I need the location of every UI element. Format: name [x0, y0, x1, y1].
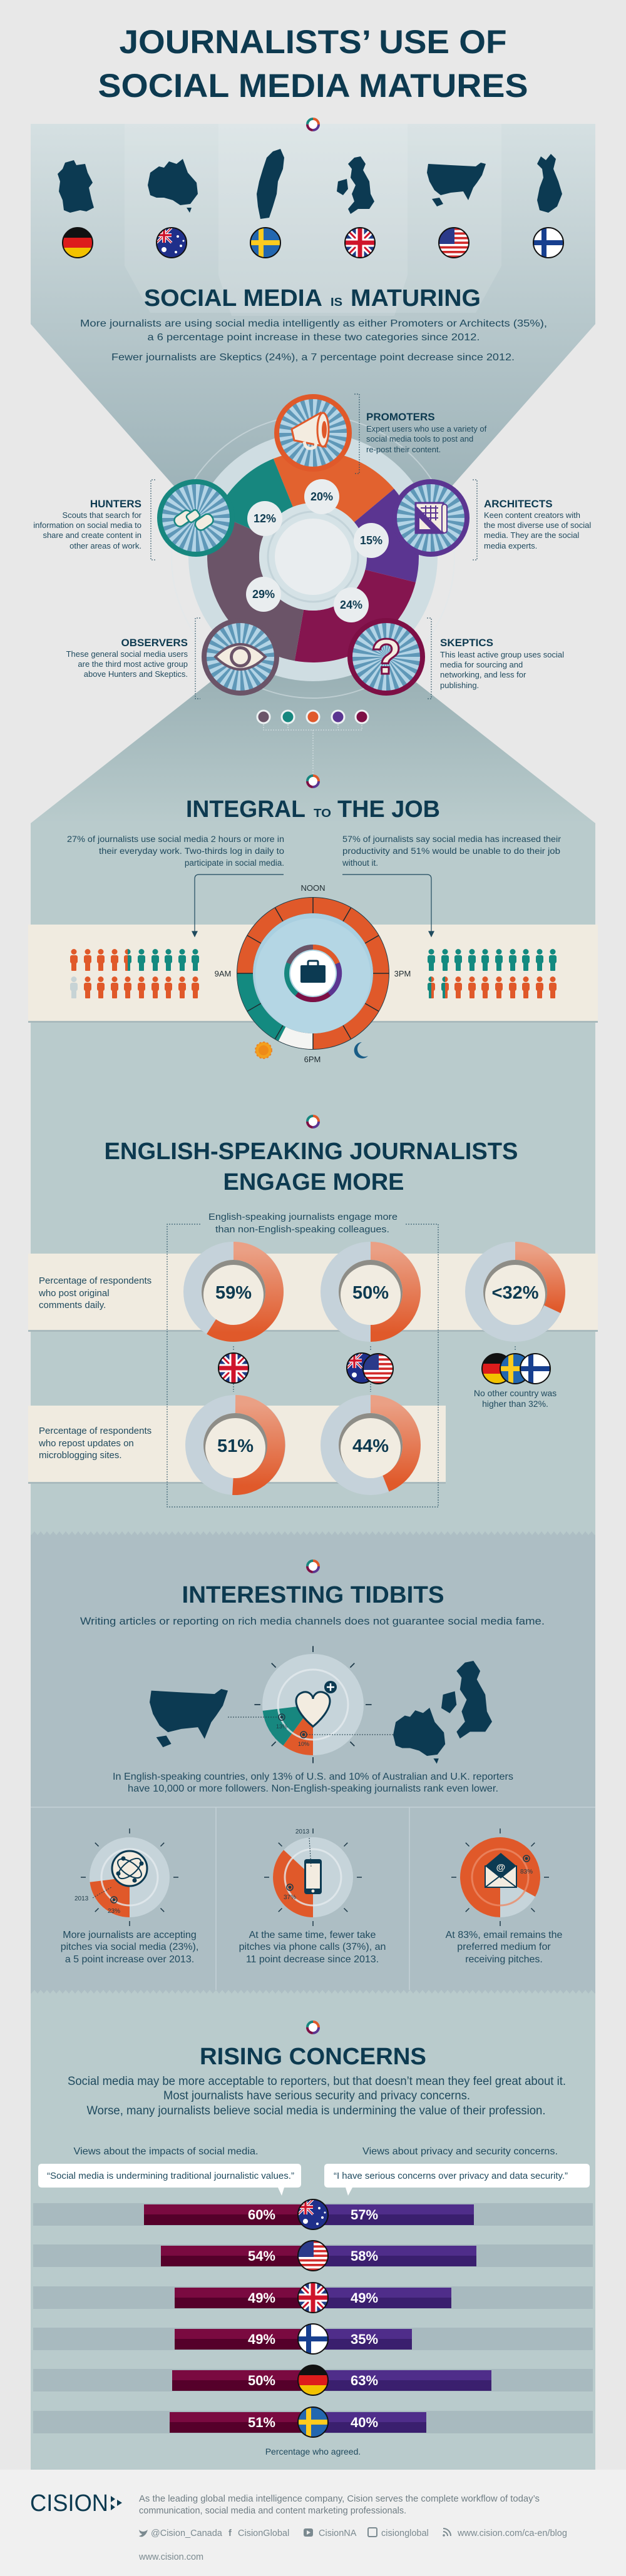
badges: percentages: 29% — [252, 588, 275, 601]
text: followers: have 10,000 or more followers. Non-English-speaking journalists rank even lower. — [128, 1783, 498, 1794]
text: footer blurb — [139, 2494, 540, 2516]
heading: english-speaking journalists: ENGLISH-SPEAKING JOURNALISTS — [104, 1138, 518, 1165]
label: promoters: social media tools to post and — [366, 434, 473, 444]
map: US — [150, 1689, 228, 1747]
icon: architects blueprint — [394, 482, 467, 554]
label: hunters: share and create content in — [43, 530, 141, 540]
icon: sun — [255, 1042, 272, 1058]
icon: logo ring 3 — [307, 1116, 319, 1127]
row: United Kingdom: 49% — [351, 2290, 378, 2306]
country flags — [63, 228, 563, 258]
label: promoters — [354, 394, 487, 474]
text: no other country — [474, 1388, 557, 1409]
clock labels: 3PM — [394, 969, 411, 978]
legend dots — [257, 711, 368, 774]
chart: phone pitches gauge: 37% — [284, 1894, 296, 1901]
label: promoters: re-post their content. — [366, 445, 441, 454]
badges: percentages: 20% — [310, 490, 333, 503]
text: tidbit 1: a 5 point increase over 2013. — [65, 1954, 194, 1965]
callout: privacy — [324, 2164, 590, 2196]
text: maturing paragraph: More journalists are using social media intelligently as either Promoters or Architects (35%), — [80, 318, 547, 329]
label: skeptics: networking, and less for — [440, 670, 526, 679]
text: website: www.cision.com — [138, 2552, 203, 2562]
social links: f — [228, 2528, 232, 2538]
row: United States: 58% — [351, 2248, 378, 2264]
text: views headings: Views about the impacts of social media. — [74, 2146, 258, 2157]
icon: envelope — [485, 1853, 516, 1887]
text: integral right: 57% of journalists say social media has increased their — [342, 834, 562, 844]
donut: 51%: 51% — [217, 1436, 254, 1456]
label: architects: media experts. — [484, 541, 537, 550]
icon: briefcase — [300, 961, 326, 983]
dotted box: english-speaking — [167, 1224, 438, 1507]
chart: followers heart gauge — [228, 1646, 393, 1763]
text: integral right — [342, 834, 562, 868]
clock labels: 6PM — [304, 1055, 321, 1064]
heading: english-speaking journalists — [104, 1138, 518, 1195]
icon: envelope: @ — [496, 1862, 505, 1873]
chart: social pitches gauge: 2013 — [74, 1895, 89, 1902]
icon: skeptics question: ? — [371, 629, 401, 684]
text: followers: In English-speaking countries, only 13% of U.S. and 10% of Australian and U.K. reporters — [113, 1772, 513, 1782]
label: observers: are the third most active group — [78, 659, 188, 669]
social links: cisionglobal — [381, 2528, 429, 2538]
callout: journalistic values: “Social media is undermining traditional journalistic values.” — [47, 2171, 294, 2181]
chart: followers heart gauge: 10% — [298, 1741, 309, 1747]
social links: CisionGlobal — [238, 2528, 289, 2538]
donut: <32% — [475, 1251, 557, 1332]
callout: journalistic values — [38, 2164, 301, 2196]
social links: www.cision.com/ca-en/blog — [457, 2528, 567, 2538]
clock labels: NOON — [300, 883, 326, 893]
icon: hunters binoculars — [160, 482, 232, 554]
icon: logo ring 1 — [307, 119, 319, 130]
logo: cision: CISION — [30, 2490, 108, 2517]
text: comments label: who post original — [38, 1288, 110, 1299]
title: JOURNALISTS’ USE OF — [119, 24, 507, 61]
text: integral right: productivity and 51% would be unable to do their job — [342, 846, 560, 856]
text: footer blurb: As the leading global media intelligence company, Cision serves the complete workflow of today’s — [139, 2494, 540, 2504]
heading: social media is maturing: MATURING — [351, 285, 481, 312]
text: tidbit 2: pitches via phone calls (37%), an — [239, 1942, 386, 1952]
label: observers: above Hunters and Skeptics. — [84, 669, 188, 679]
donut: 44% — [329, 1404, 412, 1486]
text: tidbit 2: 11 point decrease since 2013. — [246, 1954, 379, 1965]
panel: top funnel — [31, 124, 595, 643]
heading: integral to the job — [186, 796, 440, 823]
footer — [0, 2470, 626, 2576]
text: concerns paragraph: Social media may be more acceptable to reporters, but that doesn’t mean they feel great about it. — [68, 2075, 566, 2088]
text: no other country: higher than 32%. — [482, 1399, 548, 1409]
chart: social pitches gauge: 23% — [108, 1908, 120, 1915]
band: original comments — [28, 1254, 598, 1331]
label: architects: Keen content creators with — [484, 510, 580, 520]
label: hunters: Scouts that search for — [63, 510, 142, 520]
text: followers — [113, 1772, 513, 1794]
heading: rising concerns: RISING CONCERNS — [200, 2044, 426, 2070]
text: integral left: participate in social media. — [185, 858, 284, 868]
chart: user types wheel — [172, 415, 454, 698]
text: tidbits subtitle: Writing articles or reporting on rich media channels does not guarantee social media fame. — [80, 1615, 545, 1627]
row: Australia: 57% — [351, 2207, 378, 2223]
donut: <32%: <32% — [492, 1283, 539, 1303]
text: tidbit 2: At the same time, fewer take — [249, 1930, 376, 1940]
donut: 51% — [194, 1404, 277, 1486]
text: concerns paragraph: Most journalists have serious security and privacy concerns. — [163, 2089, 470, 2102]
text: maturing paragraph — [80, 318, 547, 363]
arrows: brackets to people — [192, 875, 434, 936]
chart: phone pitches gauge: 2013 — [295, 1828, 310, 1835]
heading: social media is maturing: IS — [331, 296, 342, 308]
badges: percentages: 15% — [360, 534, 382, 547]
chart: work-day clock — [237, 897, 389, 1050]
map: Australia and UK — [393, 1661, 492, 1763]
label: skeptics: publishing. — [440, 681, 479, 690]
badges: percentages: 12% — [254, 512, 276, 525]
label: architects: the most diverse use of social — [484, 520, 591, 530]
icon: promoters megaphone — [277, 397, 349, 469]
panel: rising concerns — [31, 1990, 595, 2470]
heading: interesting tidbits: INTERESTING TIDBITS — [182, 1582, 444, 1608]
text: tidbit 1: More journalists are accepting — [63, 1930, 197, 1940]
text: concerns paragraph: Worse, many journalists believe social media is undermining the value of their profession. — [86, 2104, 546, 2117]
row: United Kingdom — [175, 2283, 451, 2313]
row: Finland: 49% — [248, 2331, 275, 2347]
social links: @Cision_Canada — [151, 2528, 223, 2538]
donut: 50% — [329, 1251, 412, 1332]
text: tidbit 3: preferred medium for — [457, 1942, 551, 1952]
label: hunters: other areas of work. — [69, 541, 141, 550]
icon: globe — [112, 1851, 147, 1886]
text: english subtitle: than non-English-speaking colleagues. — [215, 1224, 389, 1235]
chart: email pitches gauge — [451, 1828, 549, 1926]
badges: percentages: 24% — [340, 599, 362, 611]
icon: logo ring 4 — [307, 1561, 319, 1572]
heading: social media is maturing: SOCIAL MEDIA — [144, 285, 322, 312]
label: skeptics: This least active group uses social — [440, 650, 564, 659]
row: Germany: 50% — [248, 2373, 275, 2388]
chart: social pitches gauge — [74, 1828, 178, 1926]
heading: social media is maturing — [144, 285, 481, 312]
chart: email pitches gauge: 83% — [520, 1869, 533, 1875]
label: hunters: information on social media to — [33, 520, 141, 530]
text: english subtitle: English-speaking journalists engage more — [208, 1212, 398, 1222]
row: Sweden: 40% — [351, 2415, 378, 2430]
row: Sweden: 51% — [248, 2415, 275, 2430]
text: english subtitle — [208, 1212, 398, 1235]
label: architects — [473, 480, 591, 560]
row: Finland — [175, 2324, 412, 2354]
text: repost label — [38, 1426, 151, 1461]
icon: logo ring 2 — [307, 776, 319, 787]
text: concerns paragraph — [68, 2075, 566, 2117]
callout: privacy: “I have serious concerns over privacy and data security.” — [334, 2171, 568, 2181]
icon: moon — [354, 1042, 368, 1058]
panel: lower body — [31, 601, 595, 1534]
text: tidbit 2 — [239, 1930, 386, 1965]
people: left — [70, 949, 199, 998]
text: comments label: Percentage of respondents — [39, 1275, 151, 1286]
text: tidbit 3 — [446, 1930, 562, 1965]
chart: followers heart gauge: 13% — [276, 1723, 287, 1730]
row: United States: 54% — [248, 2248, 275, 2264]
donut: 44%: 44% — [352, 1436, 389, 1456]
text: integral left: 27% of journalists use social media 2 hours or more in — [67, 834, 284, 844]
text: repost label: Percentage of respondents — [39, 1426, 151, 1436]
text: integral left — [67, 834, 284, 868]
row: Finland: 35% — [351, 2331, 378, 2347]
text: views headings: Views about privacy and security concerns. — [362, 2146, 558, 2157]
row: United States — [161, 2241, 476, 2271]
label: skeptics: SKEPTICS — [440, 637, 493, 649]
text: tidbit 3: At 83%, email remains the — [446, 1930, 562, 1940]
title — [98, 24, 528, 104]
label: promoters: Expert users who use a variety of — [366, 424, 487, 434]
text: repost label: microblogging sites. — [39, 1450, 122, 1461]
label: hunters — [33, 480, 155, 560]
text: integral right: without it. — [342, 858, 378, 868]
text: views headings — [74, 2146, 558, 2157]
label: hunters: HUNTERS — [90, 498, 141, 510]
heading: integral to the job: TO — [314, 807, 331, 819]
icon: phone — [304, 1859, 322, 1894]
clock labels — [215, 883, 411, 1064]
row: United Kingdom: 49% — [248, 2290, 275, 2306]
icon: skeptics question — [350, 621, 423, 693]
row: Germany: 63% — [351, 2373, 378, 2388]
clock labels: 9AM — [215, 969, 231, 978]
panel: tidbits — [31, 1531, 595, 1993]
donut: 59%: 59% — [215, 1283, 252, 1303]
band: repost updates — [28, 1406, 446, 1483]
heading: integral to the job: INTEGRAL — [186, 796, 305, 823]
row: Australia: 60% — [248, 2207, 275, 2223]
text: maturing paragraph: Fewer journalists are Skeptics (24%), a 7 percentage point decrease since 2012. — [111, 352, 515, 363]
chart: phone pitches gauge — [264, 1828, 362, 1926]
label: skeptics — [427, 618, 564, 699]
icon: observers eye — [204, 621, 277, 693]
row: Germany — [172, 2365, 491, 2395]
label: architects: ARCHITECTS — [484, 498, 553, 510]
heading: integral to the job: THE JOB — [337, 796, 440, 823]
text: tidbit 1: pitches via social media (23%), — [61, 1942, 198, 1952]
donut: 59% — [193, 1251, 275, 1332]
label: promoters: PROMOTERS — [366, 411, 435, 423]
chart: country bars — [33, 2199, 593, 2437]
text: tidbit 1 — [61, 1930, 198, 1965]
social links — [139, 2528, 567, 2538]
text: integral left: their everyday work. Two-thirds log in daily to — [99, 846, 284, 856]
title: SOCIAL MEDIA MATURES — [98, 68, 528, 104]
people: right — [428, 949, 557, 998]
text: percentage who agreed: Percentage who agreed. — [265, 2447, 361, 2457]
text: maturing paragraph: a 6 percentage point increase in these two categories since 2012. — [148, 332, 480, 343]
row: Sweden — [170, 2407, 426, 2437]
donut: 50%: 50% — [352, 1283, 389, 1303]
text: repost label: who repost updates on — [38, 1438, 134, 1449]
heading: english-speaking journalists: ENGAGE MORE — [223, 1169, 404, 1195]
label: architects: media. They are the social — [484, 530, 579, 540]
text: tidbit 3: receiving pitches. — [465, 1954, 543, 1965]
social links: CisionNA — [319, 2528, 357, 2538]
country maps — [58, 149, 562, 219]
badges: percentages — [246, 479, 389, 622]
label: observers — [66, 618, 200, 699]
band: cream clock band — [28, 925, 598, 1022]
text: footer blurb: communication, social media and content marketing professionals. — [139, 2506, 406, 2516]
row: Australia — [144, 2199, 474, 2229]
label: skeptics: media for sourcing and — [440, 660, 523, 669]
icon: heart — [296, 1692, 330, 1727]
flags: english section — [218, 1346, 550, 1392]
text: comments label — [38, 1275, 151, 1311]
label: observers: These general social media users — [66, 649, 188, 659]
text: comments label: comments daily. — [39, 1300, 106, 1311]
text: no other country: No other country was — [474, 1388, 557, 1398]
label: observers: OBSERVERS — [121, 637, 188, 649]
icon: logo ring 5 — [307, 2022, 319, 2033]
